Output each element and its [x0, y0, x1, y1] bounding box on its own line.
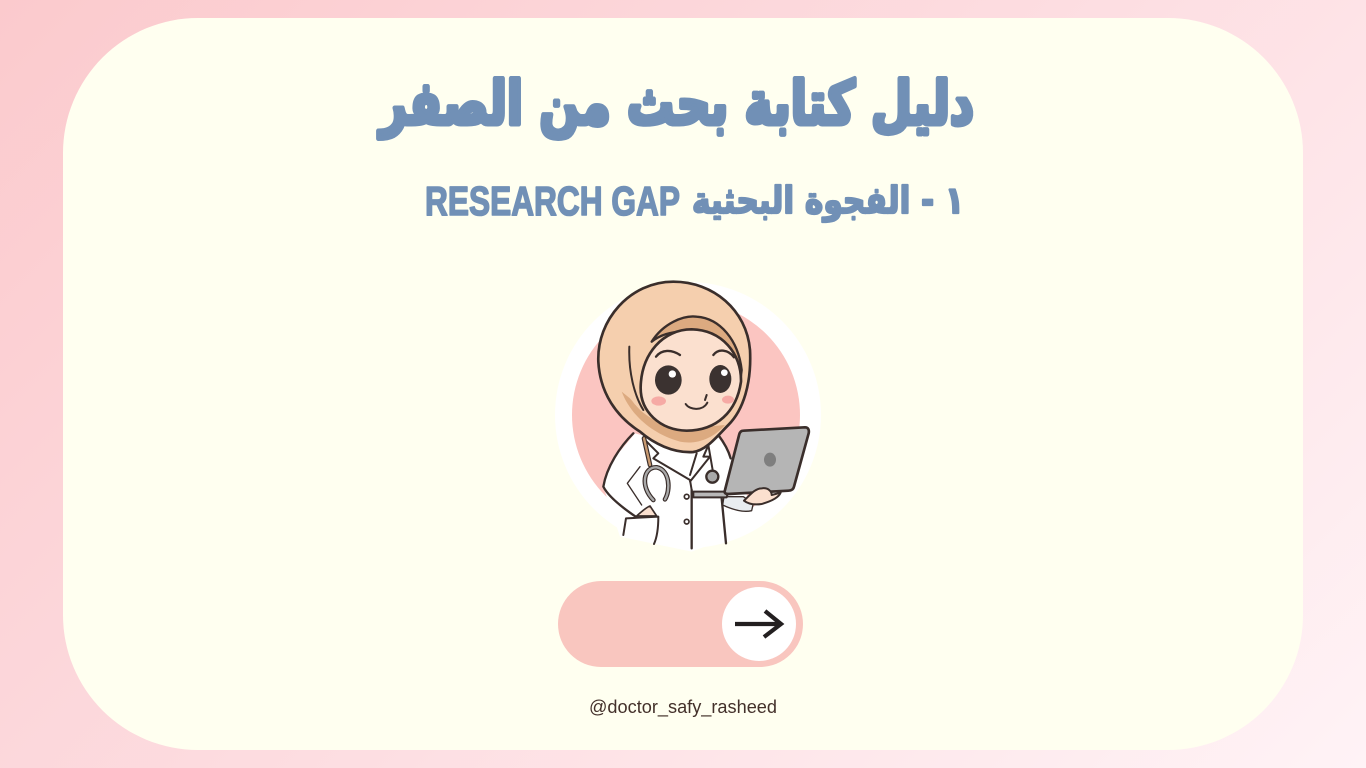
icon: arrow	[735, 611, 781, 637]
illustration: doctor with laptop	[555, 282, 821, 552]
sleeve	[723, 497, 753, 511]
subtitle	[425, 178, 964, 224]
subtitle: arabic part: ١ - الفجوة البحثية	[692, 179, 964, 222]
white backdrop circle	[555, 282, 821, 548]
pink circle	[572, 301, 800, 529]
stethoscope	[644, 438, 718, 500]
title: دليل كتابة بحث من الصفر	[378, 69, 974, 139]
laptop and hand	[693, 427, 809, 511]
pill	[558, 581, 803, 667]
cheeks	[651, 396, 666, 406]
hijab	[598, 282, 750, 452]
pocket	[623, 517, 658, 544]
white coat	[603, 433, 753, 552]
toggle button	[558, 581, 803, 667]
eyes	[655, 365, 682, 395]
face	[641, 329, 741, 431]
smile	[686, 395, 707, 409]
knob	[722, 587, 796, 661]
footer handle: @doctor_safy_rasheed	[589, 697, 777, 718]
subtitle: latin part: RESEARCH GAP	[425, 178, 680, 224]
